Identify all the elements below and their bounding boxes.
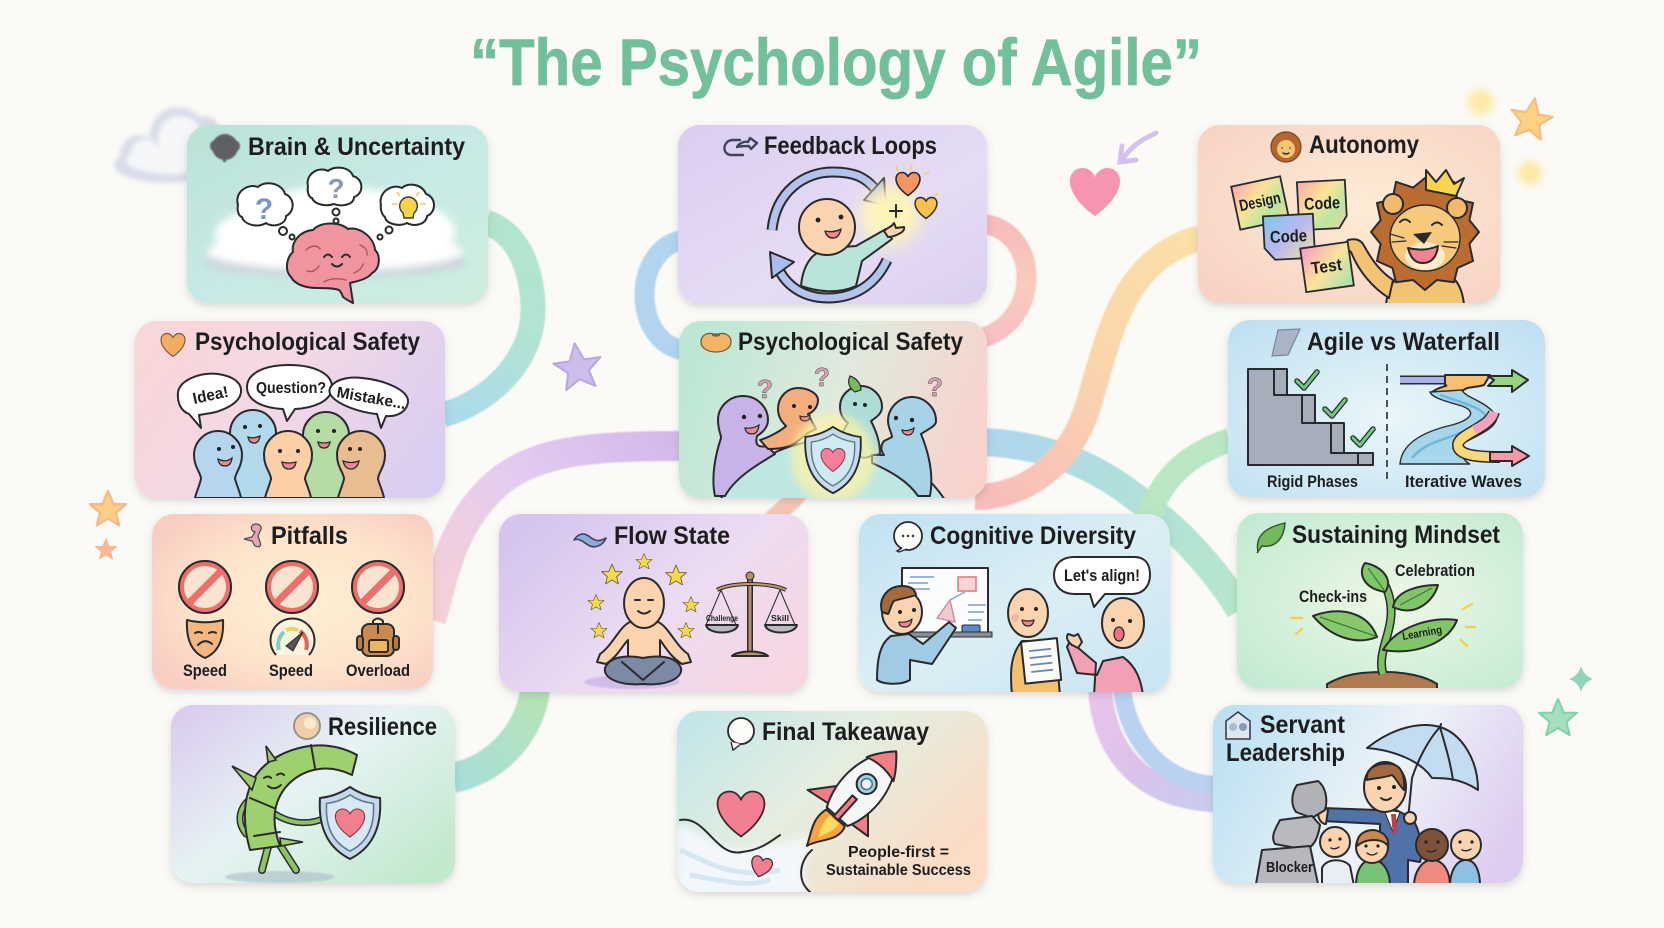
arrow: purple to heart — [1120, 133, 1156, 162]
illustration: meditating person — [584, 578, 691, 689]
illustration: team around shield — [713, 386, 945, 502]
speech bubble: Question: Question? — [256, 380, 326, 397]
question marks: ? — [814, 362, 830, 392]
decorative stars and hearts — [90, 89, 1593, 735]
icon: no sign left — [179, 561, 231, 613]
question marks: ? — [757, 374, 773, 404]
sticky note: Design: Design — [1238, 190, 1282, 215]
panel: sustaining mindset — [1237, 513, 1523, 690]
heart: large pink — [1070, 168, 1120, 216]
label: iterative waves: Iterative Waves — [1405, 472, 1522, 491]
sticky note: Code middle: Code — [1270, 226, 1307, 247]
question marks — [757, 362, 943, 404]
ribbon: feedback blue loop — [644, 240, 682, 350]
icon: backpack — [357, 618, 399, 656]
sticky note: Code: Code — [1304, 193, 1340, 214]
heading: Agile vs Waterfall — [1307, 328, 1500, 356]
speech bubble: Let's align — [1054, 557, 1150, 607]
panel: flow state — [499, 514, 808, 692]
chart: rigid staircase — [1248, 369, 1373, 465]
thought bubble: left question — [237, 183, 294, 240]
ribbon: autonomy to centre — [975, 238, 1200, 497]
icon: hearts and plus — [890, 165, 938, 218]
speech bubble: Idea: Idea! — [191, 384, 230, 408]
ribbon: under safety stub — [770, 492, 800, 522]
panel: agile vs waterfall — [1228, 320, 1545, 497]
speech bubble: Question — [247, 365, 332, 421]
panel: cognitive diversity — [859, 514, 1170, 695]
panel: servant leadership — [1213, 705, 1523, 886]
text: sustainable success: Sustainable Success — [826, 862, 971, 879]
panel: resilience — [171, 705, 455, 883]
text: people first: People-first = — [848, 844, 949, 861]
heading: Cognitive Diversity — [930, 522, 1136, 550]
icons: check mark fill — [1297, 372, 1373, 445]
thought bubble: lightbulb — [378, 185, 434, 240]
heading line 2: Leadership — [1226, 739, 1345, 767]
decorative cloud behind brain card — [114, 107, 222, 183]
icon: large heart — [718, 792, 764, 836]
glow: top right — [1468, 89, 1494, 115]
sticky note: Code — [1297, 180, 1347, 230]
icon: peach ball — [294, 713, 320, 739]
icon: grey brain — [210, 134, 240, 162]
sparkle: green — [1569, 666, 1593, 692]
heading: Flow State — [614, 522, 730, 550]
sticky note: Test — [1300, 242, 1354, 292]
illustration: leader — [1318, 762, 1422, 884]
panel: psychological safety centre — [679, 321, 987, 502]
ribbon: safety to pitfalls — [431, 446, 682, 620]
star: gold top right — [1507, 95, 1555, 141]
chart: iterative waves — [1400, 370, 1529, 466]
icon: wave — [574, 534, 606, 547]
speech bubble: Idea — [178, 374, 241, 428]
illustration: boulders — [1256, 781, 1326, 884]
thought bubble: middle question: ? — [327, 173, 345, 204]
icon: orange heart — [161, 334, 185, 356]
illustration: sprout — [1313, 563, 1457, 690]
label: Speed: Speed — [269, 661, 313, 680]
heading: Pitfalls — [271, 522, 348, 550]
icon: leaf — [1257, 523, 1285, 553]
heading: Psychological Safety — [195, 328, 420, 356]
heading: Feedback Loops — [764, 132, 937, 160]
illustration: pointing person — [877, 586, 956, 684]
icon: chat bubble — [728, 718, 754, 750]
ribbon: feedback pink loop — [982, 224, 1026, 338]
panel: final takeaway — [677, 711, 987, 895]
title: “The Psychology of Agile” — [470, 25, 1202, 99]
icon: team house — [1226, 712, 1250, 739]
star: orange left — [90, 491, 126, 525]
icon: lion face — [1271, 132, 1301, 162]
heading: Psychological Safety — [738, 328, 963, 356]
illustration: bamboo character — [225, 745, 357, 883]
speech bubble: Let's align: Let's align! — [1064, 566, 1140, 585]
star: small peach left — [96, 539, 116, 559]
icon: balance scales: Challenge — [706, 614, 738, 623]
sticky note: Code middle — [1263, 214, 1315, 260]
ribbon: safety to sustaining mindset — [982, 442, 1240, 610]
heading line 1: Servant — [1260, 711, 1346, 739]
ribbon: brain to psychological safety — [443, 222, 533, 415]
icon: heart shield — [320, 787, 380, 859]
question marks: ? — [927, 372, 943, 402]
divider dashed — [1386, 364, 1388, 482]
label: rigid phases: Rigid Phases — [1267, 472, 1358, 491]
illustration: whiteboard — [902, 568, 992, 637]
icon: stars — [588, 554, 699, 638]
icon: pink pitfall — [244, 524, 261, 547]
glow: lower right — [1518, 161, 1542, 185]
icon: balance scales — [706, 572, 797, 656]
ribbon: agile to cognitive — [1147, 440, 1230, 522]
illustration: cloud — [203, 187, 467, 277]
icon: sad mask — [187, 620, 223, 658]
illustration: umbrella — [1367, 724, 1478, 820]
illustration: lion — [1347, 170, 1479, 305]
icon: central shield — [805, 427, 861, 493]
thought bubble: left question: ? — [255, 193, 273, 226]
illustration: arrow loop — [770, 172, 887, 298]
label: Speed: Speed — [183, 661, 227, 680]
icon: balance scales: Skill — [771, 614, 789, 623]
speech bubble: Mistake — [329, 377, 408, 428]
label: blocker: Blocker — [1266, 859, 1313, 876]
thought bubble: middle question — [308, 168, 361, 224]
icon: loop arrows — [724, 138, 757, 155]
heading: Resilience — [328, 713, 437, 741]
heading: Final Takeaway — [762, 718, 929, 746]
illustration: smiling brain — [287, 223, 379, 303]
icon: leaf on head — [849, 376, 861, 392]
icon: slanted card — [1272, 329, 1300, 356]
illustration: team members — [1320, 827, 1481, 886]
icon: speedometer — [271, 618, 314, 655]
heading: Autonomy — [1309, 131, 1419, 159]
connector ribbons — [431, 222, 1240, 800]
ribbon: cognitive to servant pink — [1100, 690, 1215, 800]
illustration: rocket — [779, 725, 923, 872]
panel: feedback loops — [678, 125, 987, 304]
panel: pitfalls — [152, 514, 433, 689]
panel: brain and uncertainty — [187, 125, 488, 303]
ribbon: cognitive to servant blue — [1122, 690, 1215, 785]
icon: no sign middle — [266, 561, 318, 613]
label: check-ins: Check-ins — [1299, 587, 1367, 606]
icon: small heart — [748, 855, 774, 879]
icon: orange bean — [701, 333, 731, 352]
illustration: swoosh — [677, 820, 815, 895]
panel: autonomy — [1198, 125, 1500, 305]
icon: no sign right — [352, 561, 404, 613]
star: green — [1539, 699, 1577, 735]
heading: Brain & Uncertainty — [248, 133, 465, 161]
illustration: person with paper — [1008, 589, 1061, 695]
illustration: five smiling people — [194, 410, 385, 498]
sticky note: Design — [1231, 176, 1289, 230]
ribbon: resilience to flow — [453, 690, 535, 778]
sticky note: Test: Test — [1310, 255, 1343, 278]
icon: chat bubble — [894, 522, 922, 552]
sparkle lines — [1291, 604, 1475, 646]
star: purple — [551, 340, 604, 391]
speech bubble: Mistake: Mistake... — [335, 384, 407, 413]
illustration: waving person — [799, 185, 920, 291]
label: Overload: Overload — [346, 661, 410, 680]
panel: psychological safety left — [135, 321, 445, 498]
illustration: talking person — [1067, 598, 1144, 695]
heading: Sustaining Mindset — [1292, 521, 1501, 549]
icons: check marks — [1297, 372, 1373, 445]
illustration: sprout: Learning — [1401, 624, 1443, 643]
label: celebration: Celebration — [1395, 561, 1475, 580]
